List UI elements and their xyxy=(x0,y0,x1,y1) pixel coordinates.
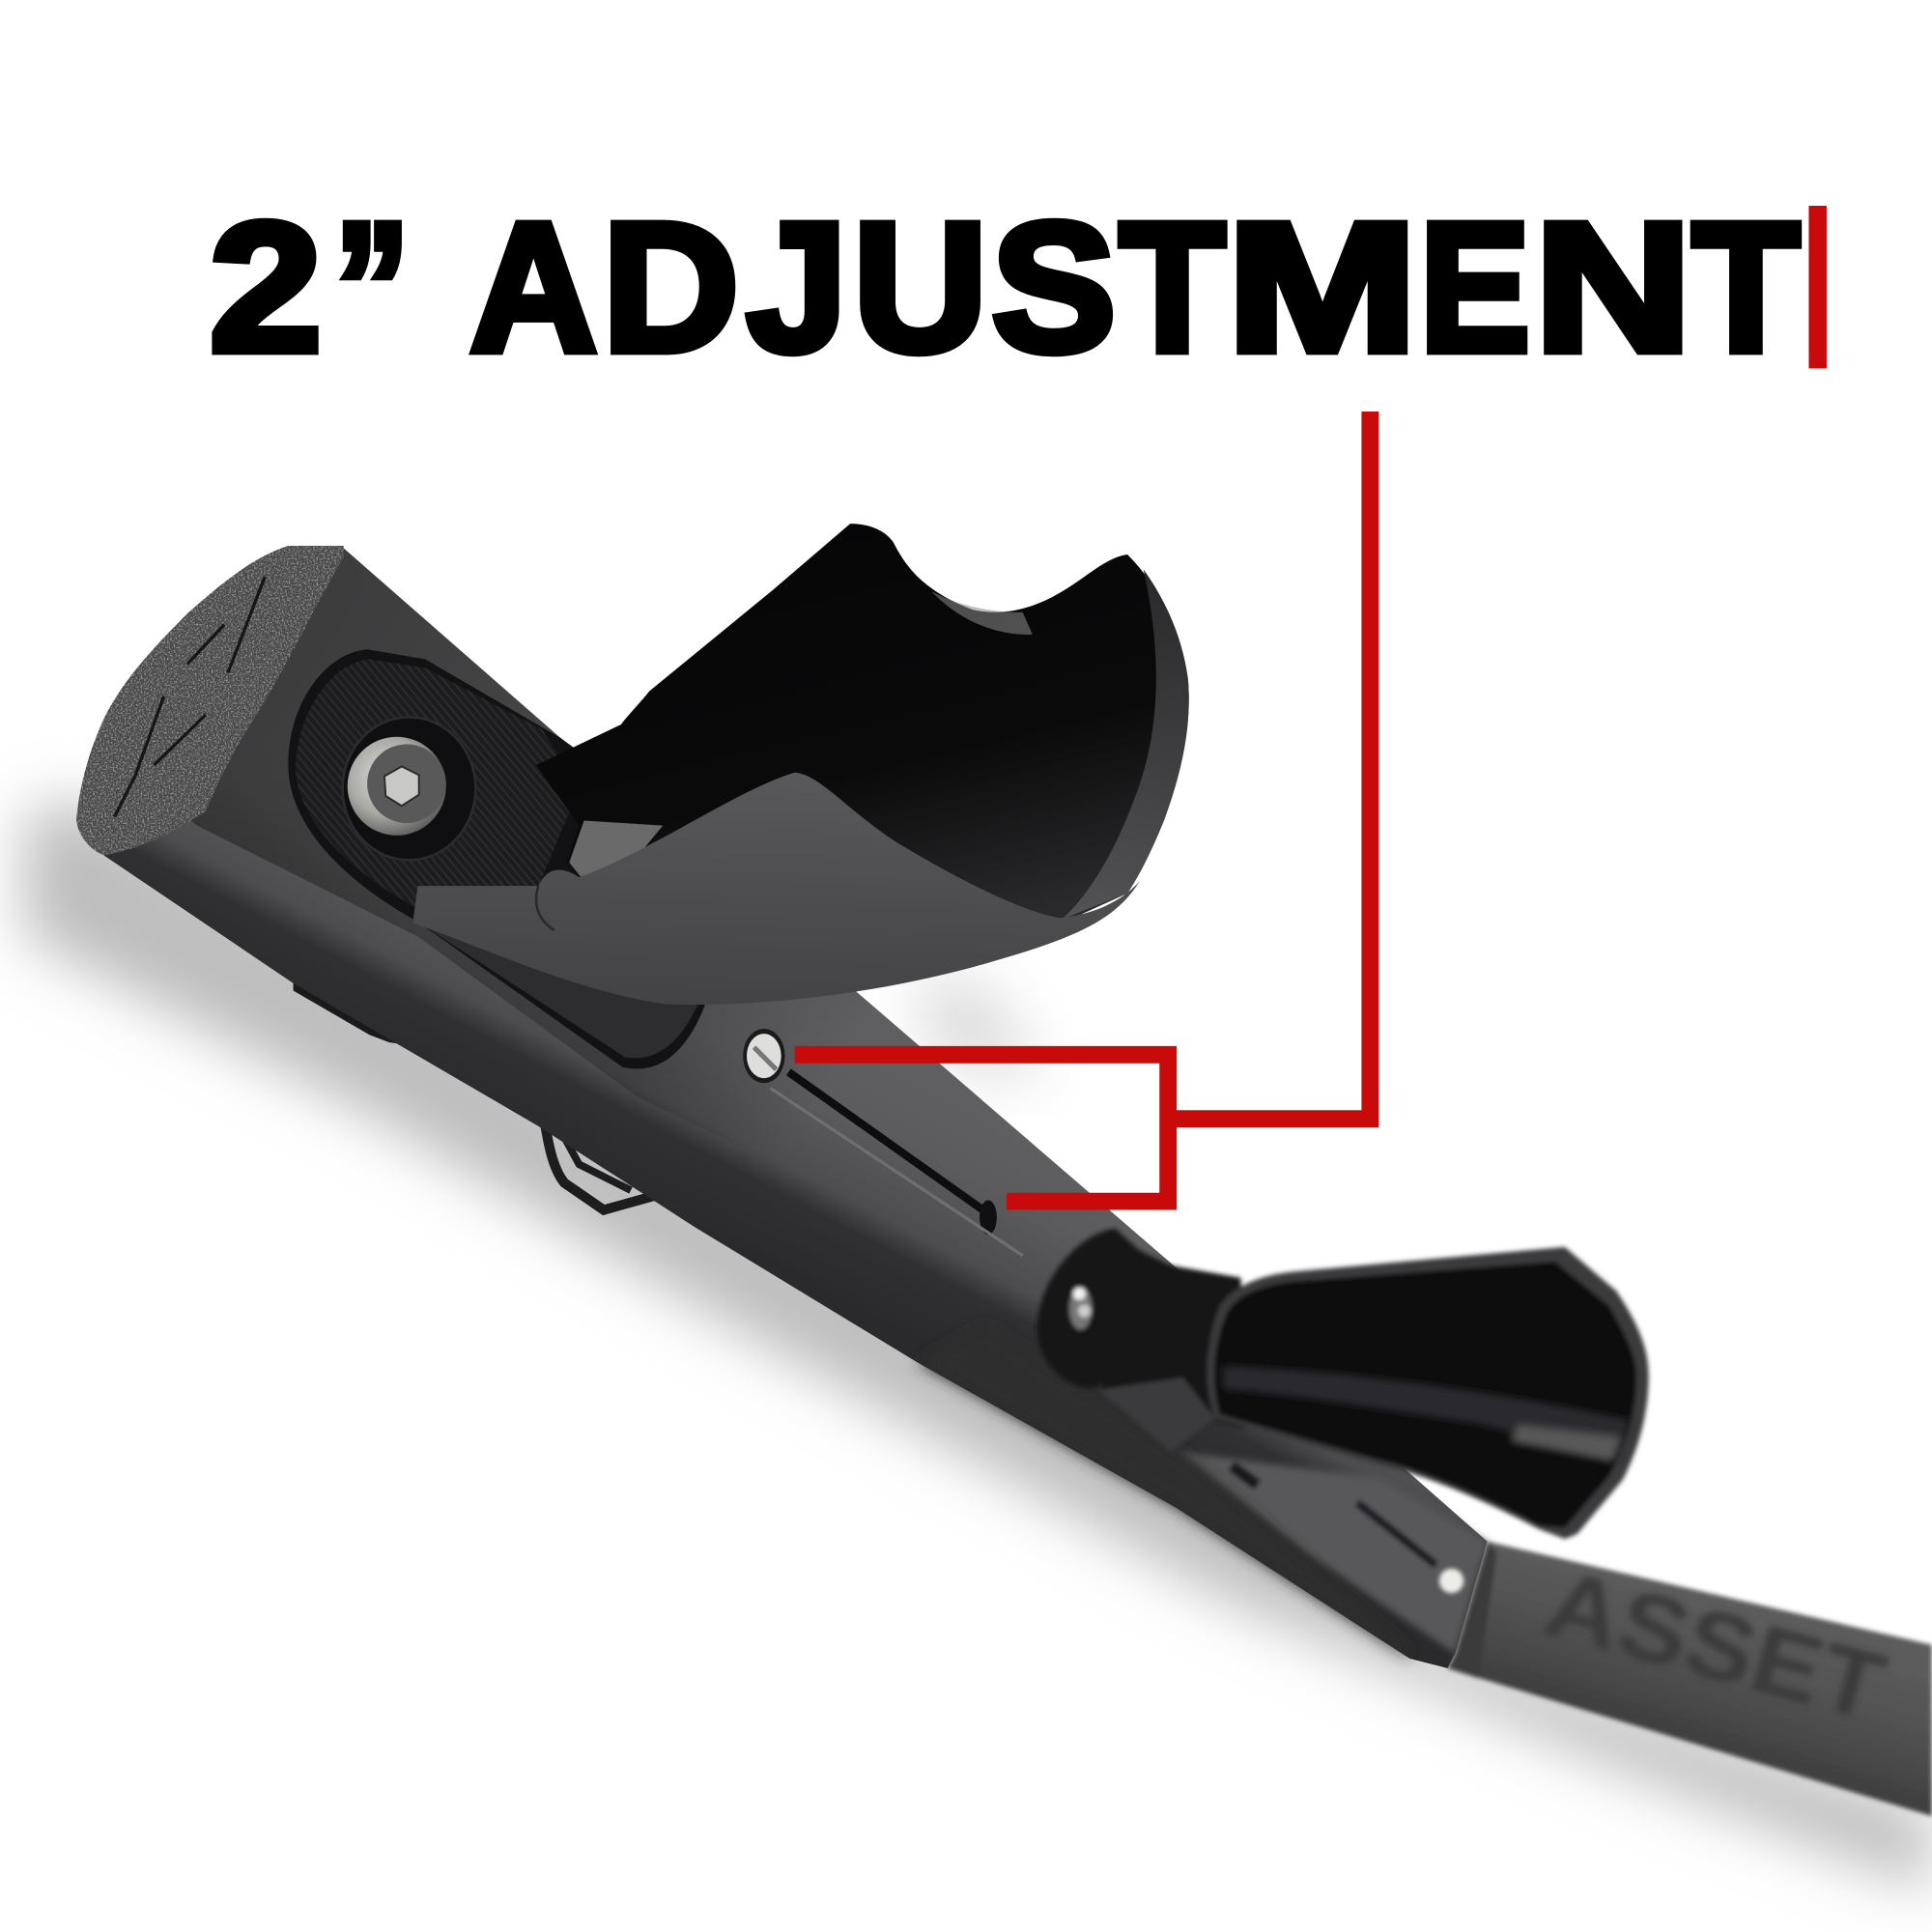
bracket under neck xyxy=(1099,1378,1215,1452)
cup lip seam xyxy=(536,886,554,930)
title: N xyxy=(1534,185,1691,390)
title: S xyxy=(992,185,1116,390)
title: U xyxy=(853,185,987,390)
clamp inner black cup xyxy=(536,524,1189,924)
clamp bright notch xyxy=(931,591,1033,635)
region beneath cup xyxy=(417,922,697,1058)
lower arm wedge highlight xyxy=(1177,1452,1488,1654)
lower clamp, out of focus xyxy=(1037,1229,1649,1539)
hex socket xyxy=(384,766,419,806)
underside fitting xyxy=(294,974,425,1047)
arm body xyxy=(103,549,1488,1668)
lower cup shell xyxy=(1208,1247,1649,1539)
adjustment slot xyxy=(770,1072,1023,1256)
lower pivot plate xyxy=(1037,1229,1144,1389)
title: T xyxy=(1692,185,1800,390)
title: D xyxy=(603,185,739,390)
end cap logo mark xyxy=(115,577,265,817)
clamp outer grey cup xyxy=(412,773,1140,1005)
lower arm dark facet xyxy=(918,1324,1409,1659)
lower cup interior xyxy=(1214,1262,1636,1528)
end cap xyxy=(76,546,344,855)
lower arm detail and pin xyxy=(1233,1466,1463,1593)
washer xyxy=(343,717,475,860)
red callout bracket xyxy=(795,412,1370,1202)
upper arm face shading xyxy=(148,549,961,1182)
hanging loop xyxy=(545,1122,666,1210)
title: 2 xyxy=(210,185,322,390)
clamp rim, rough edge xyxy=(1062,569,1189,920)
title accent bar xyxy=(1808,206,1827,368)
lower cup grey band xyxy=(1222,1365,1632,1462)
title: ” xyxy=(335,185,410,390)
title: A xyxy=(470,185,597,390)
main arm xyxy=(76,546,1932,1816)
blurred logo on bar: ASSET xyxy=(1535,1549,1895,1743)
plate face xyxy=(296,659,579,936)
neck xyxy=(1099,1249,1244,1430)
title: E xyxy=(1420,185,1530,390)
pivot plate xyxy=(288,649,705,1068)
lower cup highlight xyxy=(1509,1424,1622,1462)
bolt head xyxy=(367,744,446,823)
title: J xyxy=(747,185,847,390)
lower bolt xyxy=(1069,1288,1092,1329)
adjustment screw xyxy=(743,1029,784,1083)
pivot bolt xyxy=(348,737,446,836)
title: M xyxy=(1227,185,1417,390)
bar end of arm xyxy=(1448,1542,1932,1816)
clamp bracket xyxy=(569,820,663,881)
title: T xyxy=(1120,185,1225,390)
upper clamp xyxy=(412,524,1189,1005)
drop shadow under the arm xyxy=(25,801,1932,1891)
